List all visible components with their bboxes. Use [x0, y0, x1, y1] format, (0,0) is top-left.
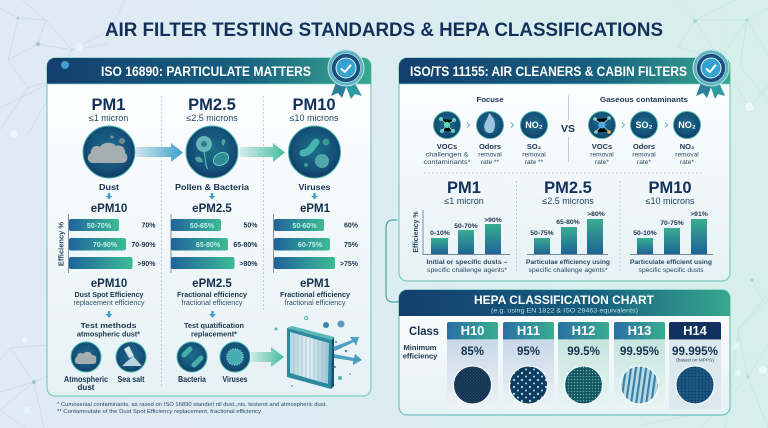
panel header: ISO 16890: PARTICULATE MATTERS [101, 64, 311, 79]
class H13: H13 [628, 323, 651, 338]
icon: viruses: Viruses [222, 375, 248, 384]
bar chart: PM1: >90% [484, 217, 502, 224]
column PM2.5: PM2.5 [188, 96, 236, 114]
bar chart: ePM1: 60% [344, 222, 359, 230]
heading: focus: Focuse [476, 95, 504, 104]
icon: sea salt: Sea salt [118, 375, 145, 384]
row label: minimum efficiency: Minimum [404, 343, 437, 352]
class H11: 95% [517, 346, 540, 358]
icon: sea salt [116, 342, 146, 384]
bar chart: ePM10: 70-90% [131, 242, 156, 249]
class H14: H14 [683, 323, 708, 338]
item: VOCs challenge [424, 112, 471, 166]
efficiency description: ePM10 [74, 278, 145, 307]
panel: ISO/TS 11155 air cleaners and cabin filters [399, 50, 730, 281]
bar chart: ePM2.5: 50% [243, 222, 258, 230]
efficiency description: ePM10: replacement efficiency [74, 300, 145, 307]
arrow: down [209, 193, 215, 200]
bar chart: PM10: ≤10 microns [646, 196, 695, 206]
item: odors: rate ** [481, 159, 500, 166]
class H14 [669, 322, 721, 409]
class H10: H10 [461, 323, 484, 338]
class H11: H11 [517, 323, 540, 338]
column PM10: Viruses [298, 182, 331, 192]
column PM10: ePM1 [300, 203, 331, 215]
class H10: 85% [461, 346, 484, 358]
bar chart: PM2.5: 50-75% [530, 230, 554, 237]
connector: cabin filters to HEPA [386, 217, 401, 302]
bar chart: PM2.5: Particulae efficiency using [526, 259, 610, 266]
bar chart: ePM1: >75% [340, 261, 359, 268]
arrow: down [311, 193, 318, 200]
bar chart: ePM10: 70% [141, 222, 156, 230]
efficiency description: ePM2.5 [177, 278, 248, 307]
bar chart: ePM2.5 [171, 219, 258, 269]
bar chart: PM10: Particulate efficient using [630, 259, 712, 266]
efficiency description: ePM1: Fractional efficiency [280, 290, 351, 299]
bar chart: PM10 [630, 179, 713, 274]
item: SO2: SO₂ [635, 120, 653, 130]
item: odors: removal [478, 152, 502, 158]
class H10 [447, 322, 498, 409]
row label: class: Class [409, 326, 439, 338]
item: NO2: rate ** [525, 159, 544, 166]
column PM1: ≤1 micron [89, 113, 128, 123]
footnotes [57, 402, 327, 415]
class H14: (based on MPPS) [676, 358, 714, 364]
panel header [47, 58, 371, 84]
bar chart: PM1: 50-70% [454, 223, 478, 230]
icon: pollen and bacteria [186, 126, 238, 178]
efficiency description: ePM1 [280, 278, 351, 307]
icon: atmospheric dust: Atmospheric [64, 375, 108, 384]
item: NO2: SO₂ [527, 142, 541, 151]
bar chart: PM1: Initial or specific dusts – [426, 259, 508, 266]
item: SO2: rate* [637, 159, 651, 166]
class H11 [503, 322, 554, 409]
icon: certification badge [328, 50, 364, 99]
arrow: into filter [250, 347, 284, 367]
item: NO2 removal [674, 112, 700, 166]
network pattern: bottom left [0, 337, 47, 428]
bar chart: ePM1: 50-60% [292, 223, 317, 230]
item: VOCs removal: rate* [595, 159, 609, 166]
icon: bacteria [177, 342, 207, 384]
footnotes: ** Contamnutate of the Dust Spot Efficiency replacement, fractional efficiency [57, 409, 261, 415]
panel background [399, 58, 730, 281]
bar chart: ePM2.5: 50-65% [190, 223, 215, 230]
icon: dust [83, 126, 135, 178]
panel: HEPA classification chart [399, 290, 730, 415]
item: VOCs challenge: VOCs [437, 142, 457, 151]
bar chart: ePM2.5: 65-80% [233, 242, 258, 249]
icon: atmospheric dust: dust [78, 383, 95, 392]
bar chart: ePM10: 50-70% [87, 223, 112, 230]
bar chart: PM2.5 [526, 179, 610, 274]
column PM1: ePM10 [91, 203, 127, 215]
heading: gaseous contaminants: Gaseous contaminants [600, 95, 688, 104]
icon: viruses [220, 342, 250, 384]
efficiency axis label: Efficiency % [413, 211, 420, 253]
item: odors [476, 112, 504, 166]
column PM1: Dust [99, 182, 119, 192]
panel header [399, 290, 730, 316]
arrow: PM2.5 to PM10 [240, 143, 285, 162]
versus label: VS [561, 123, 575, 135]
bar chart: PM2.5: specific challenge agents* [528, 267, 608, 274]
efficiency description: ePM10: Dust Spot Efficiency [74, 290, 144, 299]
bar chart: ePM1: 75% [344, 242, 359, 249]
column PM1 [83, 96, 135, 215]
footnotes: * Cumoseoial contaminants, as rased on ISO 16890 standerl nil dust.,nis, testerot and atmospheric dust. [57, 402, 327, 408]
icon: atmospheric dust [64, 342, 108, 392]
test methods text: atmospheric dust* [77, 330, 140, 338]
column PM10 [288, 96, 340, 215]
icon: viruses [288, 126, 340, 178]
item: SO2 [630, 112, 658, 166]
class H12 [558, 322, 609, 409]
panel header [399, 58, 730, 84]
bar chart: PM1: specific challenge agents* [427, 267, 507, 274]
item: NO2 [520, 112, 548, 166]
column PM2.5: ≤2.5 microns [186, 113, 238, 123]
network pattern: top left [0, 0, 125, 138]
test methods text [77, 321, 140, 338]
test quantification text: replacement* [191, 330, 237, 338]
icon: filter with airflow [274, 316, 362, 389]
class H14: 99.995% [672, 346, 718, 358]
arrow: PM1 to PM2.5 [136, 143, 183, 162]
bar chart: PM1: 0-10% [430, 230, 450, 237]
item: SO2: removal [632, 152, 656, 158]
item: odors: Odors [479, 142, 501, 151]
test quantification text: Test quatification [184, 321, 244, 330]
bar chart: PM10: 70-75% [660, 220, 684, 227]
panel header: HEPA CLASSIFICATION CHART [474, 293, 655, 307]
item: VOCs challenge: contaminants* [424, 159, 471, 166]
bar chart: PM1: PM1 [447, 179, 481, 197]
test quantification text [184, 321, 244, 338]
bar chart: ePM2.5: 65-80% [196, 242, 221, 249]
bar chart: ePM10: 70-90% [93, 242, 118, 249]
panel header: ISO/TS 11155: AIR CLEANERS & CABIN FILTERS [410, 64, 687, 79]
bar chart: PM2.5: ≤2.5 microns [542, 196, 594, 206]
column PM2.5 [175, 96, 249, 215]
class H12: H12 [572, 323, 595, 338]
row label: minimum efficiency: efficiency [403, 352, 438, 360]
bar chart: PM1 [423, 179, 510, 274]
test methods text: Test methods [80, 321, 136, 330]
network pattern: top right [675, 0, 768, 111]
item: VOCs challenge: challengen & [426, 152, 469, 158]
item: NO2 removal: rate* [680, 159, 694, 166]
efficiency description: ePM2.5: Fractional efficiency [177, 290, 248, 299]
bar chart: ePM10 [68, 214, 274, 273]
bar chart: PM1: ≤1 micron [444, 196, 484, 206]
bar chart: ePM2.5: >80% [239, 261, 258, 268]
class H13 [614, 322, 665, 409]
title: AIR FILTER TESTING STANDARDS & HEPA CLASSIFICATIONS [105, 19, 663, 41]
bar chart: PM10: PM10 [648, 179, 692, 197]
item: VOCs removal [588, 112, 616, 166]
efficiency description: ePM2.5: ePM2.5 [192, 278, 232, 290]
bar chart: ePM1: 60-75% [298, 242, 323, 249]
bar chart: PM2.5: PM2.5 [544, 179, 592, 197]
efficiency description: ePM1: ePM1 [300, 278, 331, 290]
item: VOCs removal: VOCs [592, 142, 612, 151]
panel: ISO 16890 particulate matters [47, 50, 371, 396]
item: NO2 removal: removal [675, 152, 699, 158]
bar chart: PM10: specific specific dusts [638, 267, 704, 274]
network pattern: bottom right [640, 278, 768, 428]
chevrons [467, 122, 668, 128]
arrows: down to test methods [106, 311, 216, 318]
arrow: down [106, 193, 112, 200]
column PM1: PM1 [92, 96, 125, 114]
item: NO2 removal: NO₂ [678, 120, 696, 130]
panel background [399, 290, 730, 415]
class H13: 99.95% [620, 346, 659, 358]
column PM2.5: ePM2.5 [192, 203, 232, 215]
bar chart: ePM1 [274, 219, 359, 269]
item: SO2: Odors [633, 142, 655, 151]
item: NO2 removal: NO₂ [680, 142, 694, 151]
efficiency description: ePM10: ePM10 [91, 278, 127, 290]
class H12: 99.5% [567, 346, 600, 358]
item: VOCs removal: removal [590, 152, 614, 158]
item: NO2: NO₂ [525, 120, 543, 130]
column PM10: PM10 [292, 96, 336, 114]
bar chart: PM2.5: >80% [587, 211, 605, 218]
column PM2.5: Pollen & Bacteria [175, 182, 249, 192]
efficiency description: ePM1: fractional efficiency [284, 300, 346, 307]
row label: minimum efficiency [403, 343, 438, 360]
panel background [47, 58, 371, 396]
icon: bacteria: Bacteria [178, 375, 206, 384]
bar chart: PM10: >91% [690, 211, 708, 218]
panel header: (e.g. using EN 1822 & ISO 29463 equivalents) [491, 308, 638, 314]
item: NO2: removal [522, 152, 546, 158]
bar chart: PM2.5: 65-80% [556, 219, 580, 226]
bar chart: ePM10: >90% [137, 261, 156, 268]
icon: certification badge [693, 50, 729, 99]
efficiency description: ePM2.5: fractional efficiency [182, 300, 243, 307]
bar chart: PM10: 50-10% [633, 230, 657, 237]
efficiency axis label: Efficiency % [56, 222, 66, 266]
column PM10: ≤10 microns [290, 113, 339, 123]
